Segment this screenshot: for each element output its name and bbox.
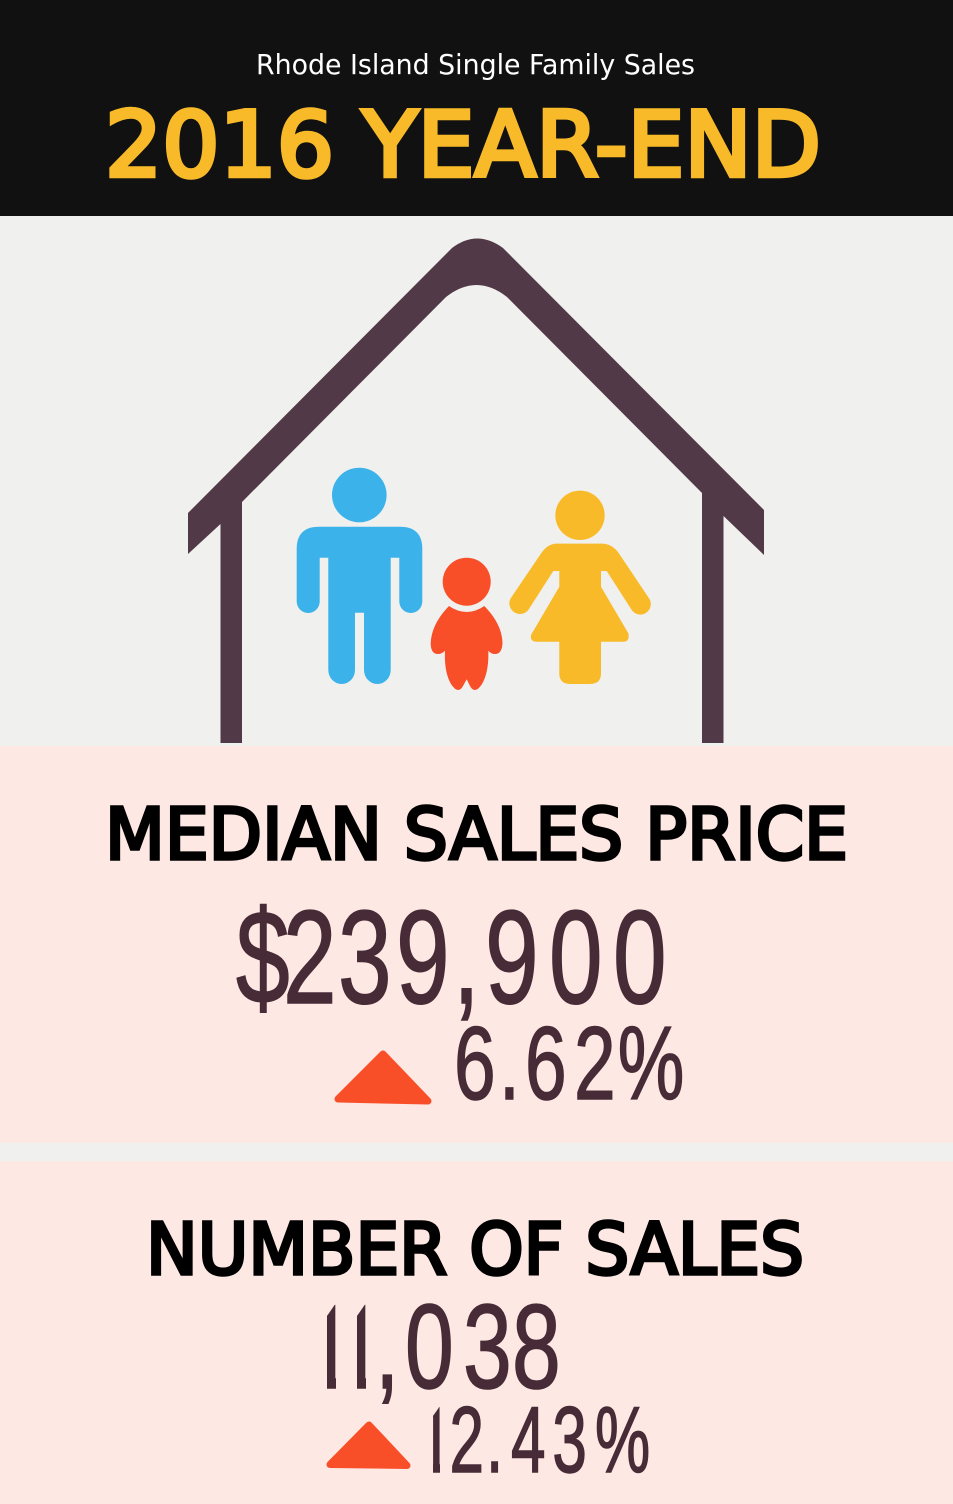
icon: up arrow (338, 1054, 428, 1101)
subtitle: Rhode Island Single Family Sales (256, 48, 695, 81)
change: 12.43% (418, 1387, 650, 1492)
value: $239,900 (236, 883, 667, 1032)
panel: header (0, 0, 953, 216)
icon: child (431, 558, 502, 690)
icon: father (297, 468, 422, 684)
icon: mother (509, 491, 651, 684)
title: 2016 YEAR-END (105, 93, 821, 198)
icon: house outline (188, 238, 764, 743)
change: 6.62% (454, 1006, 684, 1122)
heading: MEDIAN SALES PRICE (105, 793, 848, 876)
value: 11,038 (305, 1281, 561, 1414)
panel: number of sales (0, 1161, 953, 1504)
panel: median sales price (0, 746, 953, 1143)
heading: NUMBER OF SALES (146, 1208, 804, 1291)
icon: up arrow (330, 1425, 407, 1466)
